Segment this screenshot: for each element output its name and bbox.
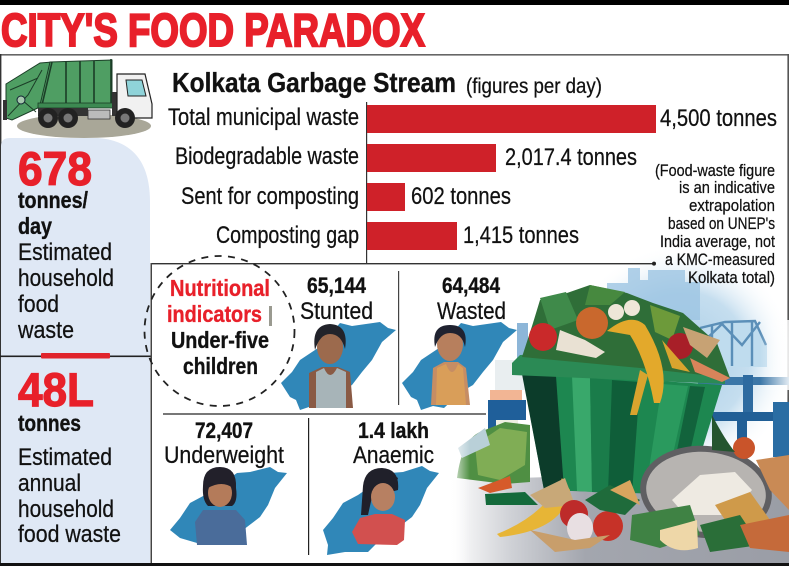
stat: 48L tonnes: 48L [18, 363, 94, 416]
icon: girl in red top [323, 466, 439, 555]
right scraps [712, 415, 789, 510]
bar: total municipal waste: Total municipal waste [168, 104, 359, 131]
illustration: overflowing green bin with city backdrop [448, 245, 789, 565]
bar chart [168, 102, 777, 263]
stat: 48L tonnes: Estimated [18, 444, 112, 471]
indicator: underweight [164, 418, 287, 545]
axis [366, 102, 367, 263]
indicator: stunted [281, 273, 396, 410]
food pile [522, 285, 730, 415]
heading: Kolkata Garbage Stream: (figures per day) [466, 75, 602, 98]
panel: household food waste stats [0, 138, 151, 563]
indicator: underweight: Underweight [164, 442, 284, 469]
fade left edge of illustration [448, 425, 470, 565]
bar: composting gap: 1,415 tonnes [463, 222, 579, 249]
callout: nutritional indicators: children [183, 353, 258, 379]
indicator: wasted: Wasted [437, 298, 506, 325]
stat: 678 tonnes per day: food [18, 291, 59, 318]
plate of leftovers [636, 439, 776, 545]
indicator: anaemic: 1.4 lakh [358, 418, 429, 443]
front scraps [497, 478, 789, 552]
callout: nutritional indicators: Under-five [171, 327, 269, 353]
top black bar [0, 0, 789, 5]
ground [450, 470, 789, 563]
icon: garbage truck [3, 59, 152, 138]
stat: 678 tonnes per day: day [18, 213, 52, 239]
bar: total municipal waste [168, 104, 777, 133]
callout: nutritional indicators [144, 256, 294, 406]
stat: 48L tonnes: tonnes [18, 410, 81, 436]
callout: nutritional indicators: indicators [167, 301, 262, 327]
bar: sent for composting [181, 183, 511, 211]
stat: 678 tonnes per day: 678 [18, 142, 92, 195]
left greens [457, 422, 538, 505]
note: food-waste figure caveat: extrapolation [689, 196, 775, 215]
backdrop skyline and bridge [488, 245, 789, 470]
bar: sent for composting: 602 tonnes [411, 183, 511, 210]
note: food-waste figure caveat: is an indicative [679, 178, 775, 197]
stat: 48L tonnes [18, 363, 121, 548]
bin rim [512, 353, 725, 384]
heading: Kolkata Garbage Stream: Kolkata Garbage Stream [172, 67, 456, 98]
stat: 48L tonnes: household [18, 496, 114, 523]
indicator: wasted [402, 273, 517, 410]
bar: biodegradable waste: Biodegradable waste [175, 143, 359, 170]
indicator: stunted: 65,144 [307, 273, 367, 298]
icon: girl in blue top [170, 467, 287, 545]
stat: 678 tonnes per day: Estimated [18, 239, 112, 266]
bottom black bar [0, 563, 789, 566]
stat: 678 tonnes per day: tonnes/ [18, 187, 89, 213]
stat: 678 tonnes per day: household [18, 265, 114, 292]
bar: biodegradable waste [175, 143, 637, 172]
icon: boy in grey vest [281, 322, 396, 410]
stat: 48L tonnes: food waste [18, 521, 121, 548]
stat: 678 tonnes per day [17, 142, 114, 344]
indicator: wasted: 64,484 [442, 273, 501, 298]
bin body [522, 372, 722, 495]
indicator: anaemic: Anaemic [353, 442, 434, 469]
note: food-waste figure caveat: Kolkata total) [688, 268, 775, 287]
divider with red accent [0, 353, 151, 358]
note: food-waste figure caveat [655, 161, 775, 287]
callout: nutritional indicators: Nutritional [170, 275, 270, 301]
panel lines: nutrition section [150, 262, 656, 564]
stat: 678 tonnes per day: waste [17, 317, 74, 344]
title: CITY'S FOOD PARADOX [1, 4, 425, 56]
bar: composting gap [216, 222, 579, 250]
indicator: anaemic [323, 418, 439, 555]
stat: 48L tonnes: annual [18, 470, 81, 497]
bar: sent for composting: Sent for composting [181, 183, 359, 210]
indicator: underweight: 72,407 [195, 418, 253, 443]
bar: biodegradable waste: 2,017.4 tonnes [505, 144, 637, 171]
icon: boy in orange vest [402, 322, 517, 410]
indicator: stunted: Stunted [300, 298, 373, 325]
bar: composting gap: Composting gap [216, 222, 359, 249]
